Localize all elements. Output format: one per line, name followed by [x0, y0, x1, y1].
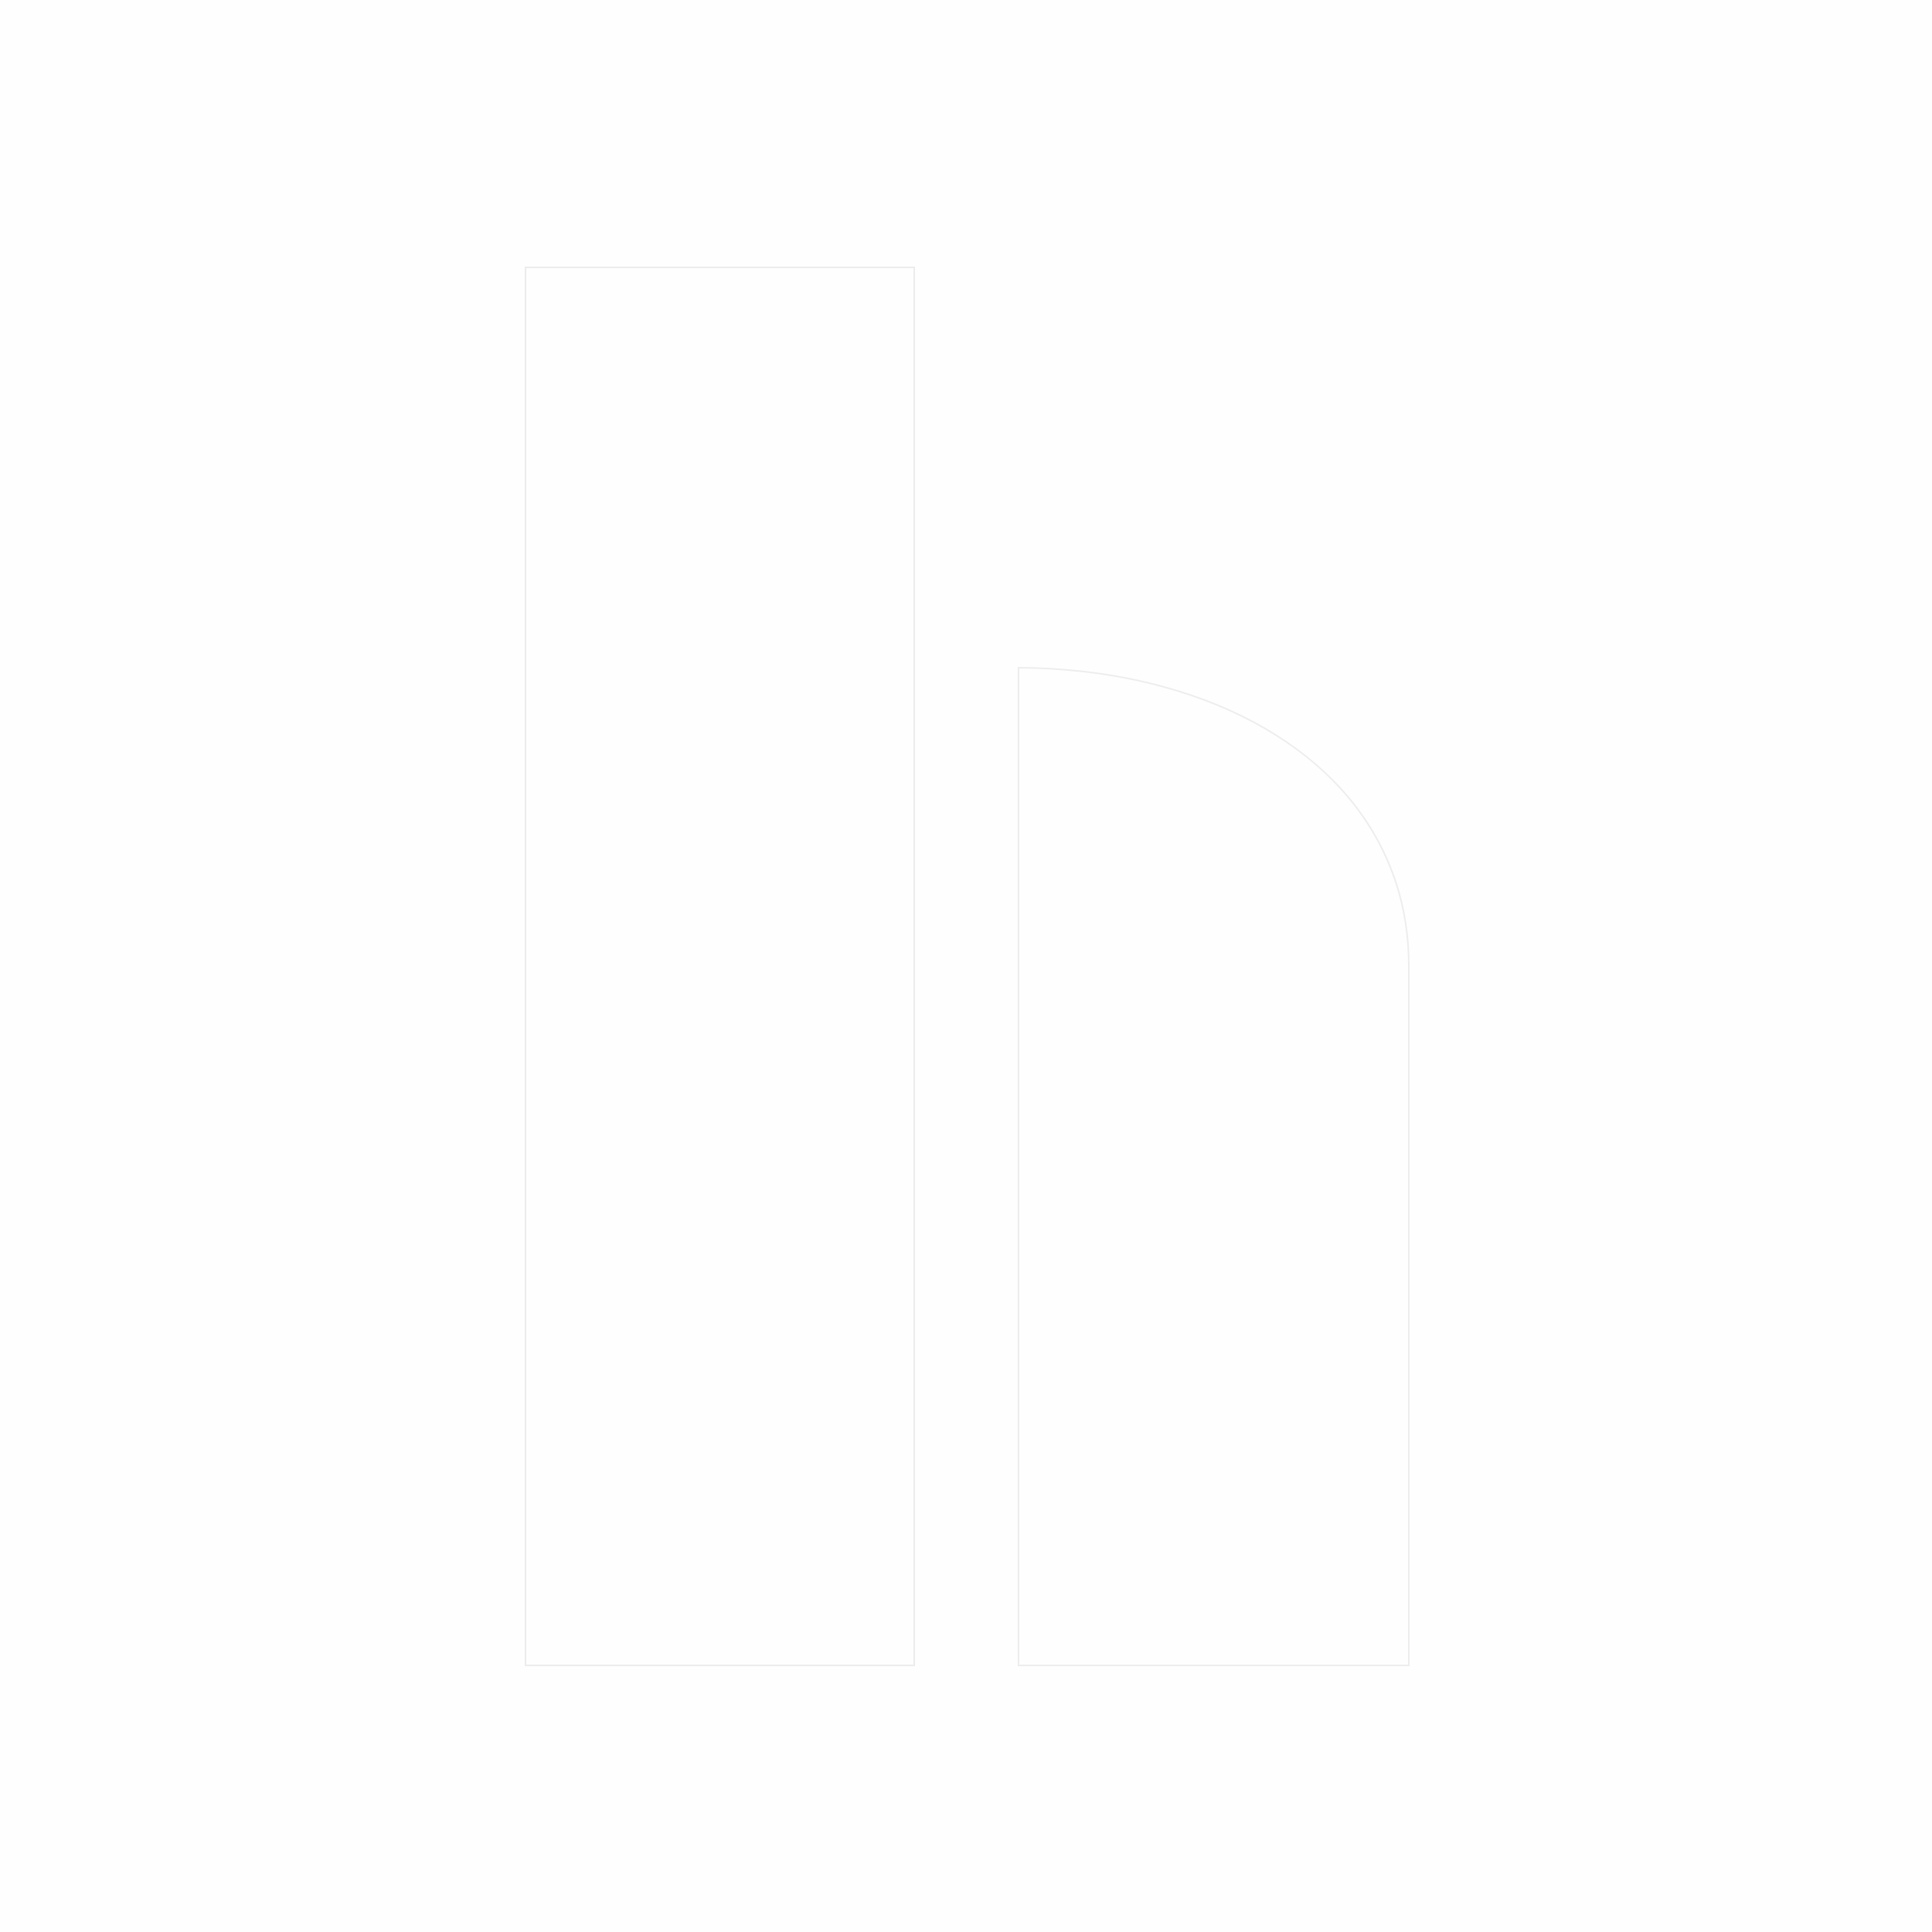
shape: left rectangle outline	[526, 267, 914, 1665]
shape: right rounded-top outline	[1019, 668, 1409, 1665]
